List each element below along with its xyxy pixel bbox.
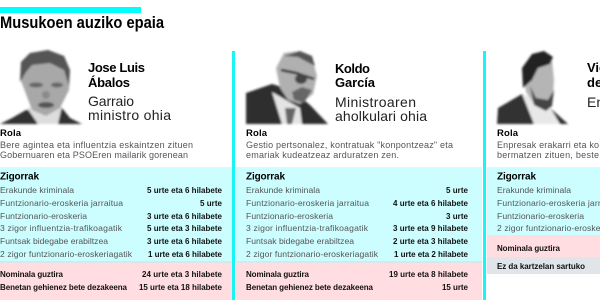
sentences panel: Zigorrak bbox=[246, 172, 285, 182]
job title: Ministroaren bbox=[335, 94, 416, 110]
sentences panel: 5 urte bbox=[200, 199, 223, 208]
name: García bbox=[335, 75, 376, 90]
totals panel bbox=[236, 261, 482, 300]
sentences panel: 3 zigor influentzia-trafikoagatik bbox=[246, 223, 369, 233]
sentences panel: 2 zigor funtzionario-eroskeriagatik bbox=[246, 249, 379, 259]
sentences panel: 3 urte bbox=[446, 212, 469, 221]
totals panel: Benetan gehienez bete dezakeena bbox=[246, 283, 374, 292]
role text: emariak kudeatzeaz arduratzen zen. bbox=[246, 150, 399, 160]
sentences panel: 2 zigor funtzionario-eroskeriagatik bbox=[0, 249, 133, 259]
sentences panel: 3 zigor influentzia-trafikoagatik bbox=[0, 223, 123, 233]
icon: portrait of Garcia bbox=[246, 51, 328, 124]
name bbox=[88, 60, 145, 90]
prison note row bbox=[487, 257, 600, 274]
icon: portrait of Aldama bbox=[497, 51, 568, 124]
icon: portrait of Abalos bbox=[0, 50, 82, 124]
title accent bar bbox=[0, 7, 141, 13]
sentences panel: Funtsak bidegabe erabiltzea bbox=[0, 236, 108, 246]
prison note row: Ez da kartzelan sartuko bbox=[497, 262, 585, 271]
sentences panel: Funtzionario-eroskeria bbox=[0, 211, 87, 221]
role text bbox=[0, 128, 193, 160]
sentences panel: Erakunde kriminala bbox=[246, 185, 320, 195]
column divider bbox=[232, 51, 235, 300]
sentences panel: 3 urte eta 9 hilabete bbox=[393, 224, 469, 233]
sentences panel: 5 urte eta 3 hilabete bbox=[147, 224, 223, 233]
totals panel: Nominala guztira bbox=[246, 270, 310, 279]
sentences panel: 4 urte eta 6 hilabete bbox=[393, 199, 469, 208]
job title: Garraio bbox=[88, 93, 134, 109]
sentences panel: 5 urte bbox=[446, 186, 469, 195]
job title bbox=[335, 94, 427, 124]
name bbox=[587, 60, 600, 90]
sentences panel: 1 urte eta 2 hilabete bbox=[394, 250, 469, 259]
total row bbox=[487, 235, 600, 257]
role text: Bere agintea eta influentzia eskaintzen zituen bbox=[0, 140, 193, 150]
job title: ministro ohia bbox=[88, 107, 171, 123]
name bbox=[335, 61, 376, 90]
totals panel: 15 urte bbox=[442, 283, 469, 292]
sentences panel bbox=[0, 167, 232, 262]
role text: bermatzen zituen, beste bbox=[497, 150, 599, 160]
name: Koldo bbox=[335, 61, 370, 76]
job title: aholkulari ohia bbox=[335, 108, 427, 124]
role text bbox=[497, 128, 599, 160]
role text: Rola bbox=[0, 128, 22, 139]
name: Ábalos bbox=[88, 75, 130, 90]
role text: Rola bbox=[246, 128, 268, 139]
role text: Rola bbox=[497, 128, 519, 139]
sentences panel: 2 urte eta 3 hilabete bbox=[393, 237, 469, 246]
sentences panel: Funtzionario-eroskeria bbox=[246, 211, 333, 221]
name: Jose Luis bbox=[88, 60, 145, 75]
role text: Enpresak erakarri eta ko bbox=[497, 140, 599, 150]
totals panel: 19 urte eta 8 hilabete bbox=[389, 270, 469, 279]
sentences panel: Zigorrak bbox=[497, 172, 536, 182]
sentences panel: 3 urte eta 6 hilabete bbox=[147, 212, 223, 221]
totals panel: 15 urte eta 18 hilabete bbox=[139, 283, 223, 292]
title: Musukoen auziko epaia bbox=[0, 13, 164, 32]
sentences panel: Funtzionario-eroskeria jarraitua bbox=[0, 198, 123, 208]
panel: Victor de Aldama bbox=[487, 51, 600, 274]
role text bbox=[246, 128, 453, 160]
sentences panel: 5 urte eta 6 hilabete bbox=[147, 186, 223, 195]
panel: Koldo Garcia bbox=[236, 51, 482, 300]
sentences panel: Funtzionario-eroskeria jarraitua bbox=[246, 198, 369, 208]
totals panel: Nominala guztira bbox=[0, 270, 64, 279]
totals panel: 24 urte eta 3 hilabete bbox=[142, 270, 223, 279]
totals panel: Benetan gehienez bete dezakeena bbox=[0, 283, 128, 292]
column divider bbox=[483, 51, 486, 300]
sentences panel: Funtzionario-eroskeria bbox=[497, 211, 584, 221]
role text: Gobernuaren eta PSOEren mailarik gorenean bbox=[0, 150, 188, 160]
role text: Gestio pertsonalez, kontratuak "konpontzeaz" eta bbox=[246, 140, 453, 150]
sentences panel bbox=[487, 167, 600, 235]
sentences panel: Zigorrak bbox=[0, 172, 39, 182]
sentences panel: 3 urte eta 6 hilabete bbox=[147, 237, 223, 246]
sentences panel: Funtsak bidegabe erabiltzea bbox=[246, 236, 354, 246]
totals panel bbox=[0, 261, 232, 300]
job title bbox=[88, 93, 171, 123]
sentences panel: Erakunde kriminala bbox=[0, 185, 74, 195]
panel: Jose Luis Abalos bbox=[0, 50, 232, 300]
total row: Nominala guztira bbox=[497, 244, 561, 253]
sentences panel: 1 urte eta 6 hilabete bbox=[148, 250, 223, 259]
sentences panel: Erakunde kriminala bbox=[497, 185, 571, 195]
sentences panel bbox=[236, 167, 482, 262]
